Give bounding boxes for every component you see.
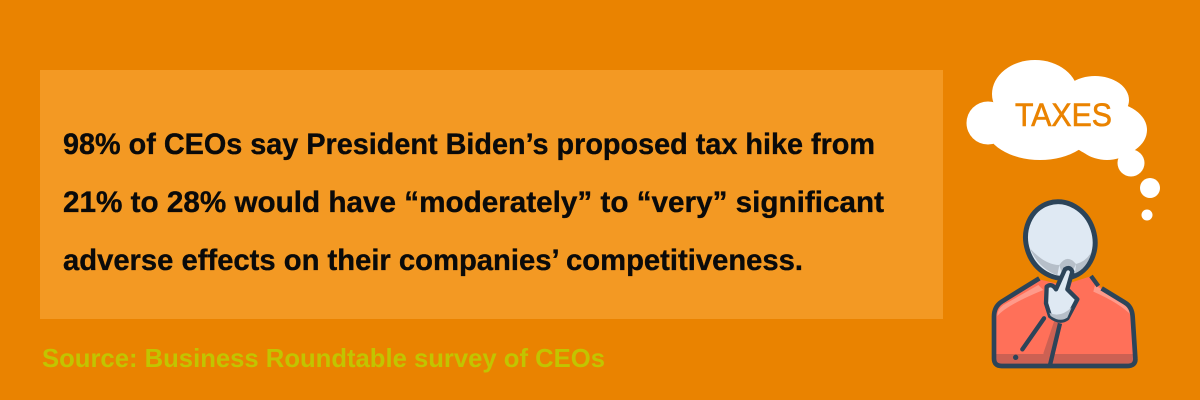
- hand: [1046, 268, 1077, 321]
- icon: thinking person: [994, 193, 1135, 366]
- arm lines: [1022, 318, 1044, 349]
- label: TAXES: TAXES: [1015, 97, 1112, 133]
- text block: CEO tax statistic: adverse effects on their companies’ competitiveness.: [63, 244, 803, 277]
- body: [994, 276, 1135, 366]
- source note: Source: Business Roundtable survey of CEOs: [42, 343, 605, 373]
- head: [1016, 193, 1105, 287]
- text block: CEO tax statistic: 98% of CEOs say President Biden’s proposed tax hike from: [63, 128, 875, 161]
- icon: thought bubble: [966, 60, 1160, 220]
- panel: statistic callout: [40, 70, 943, 319]
- text block: CEO tax statistic: [63, 128, 884, 277]
- text block: CEO tax statistic: 21% to 28% would have “moderately” to “very” significant: [63, 186, 884, 219]
- body outline: [994, 278, 1135, 366]
